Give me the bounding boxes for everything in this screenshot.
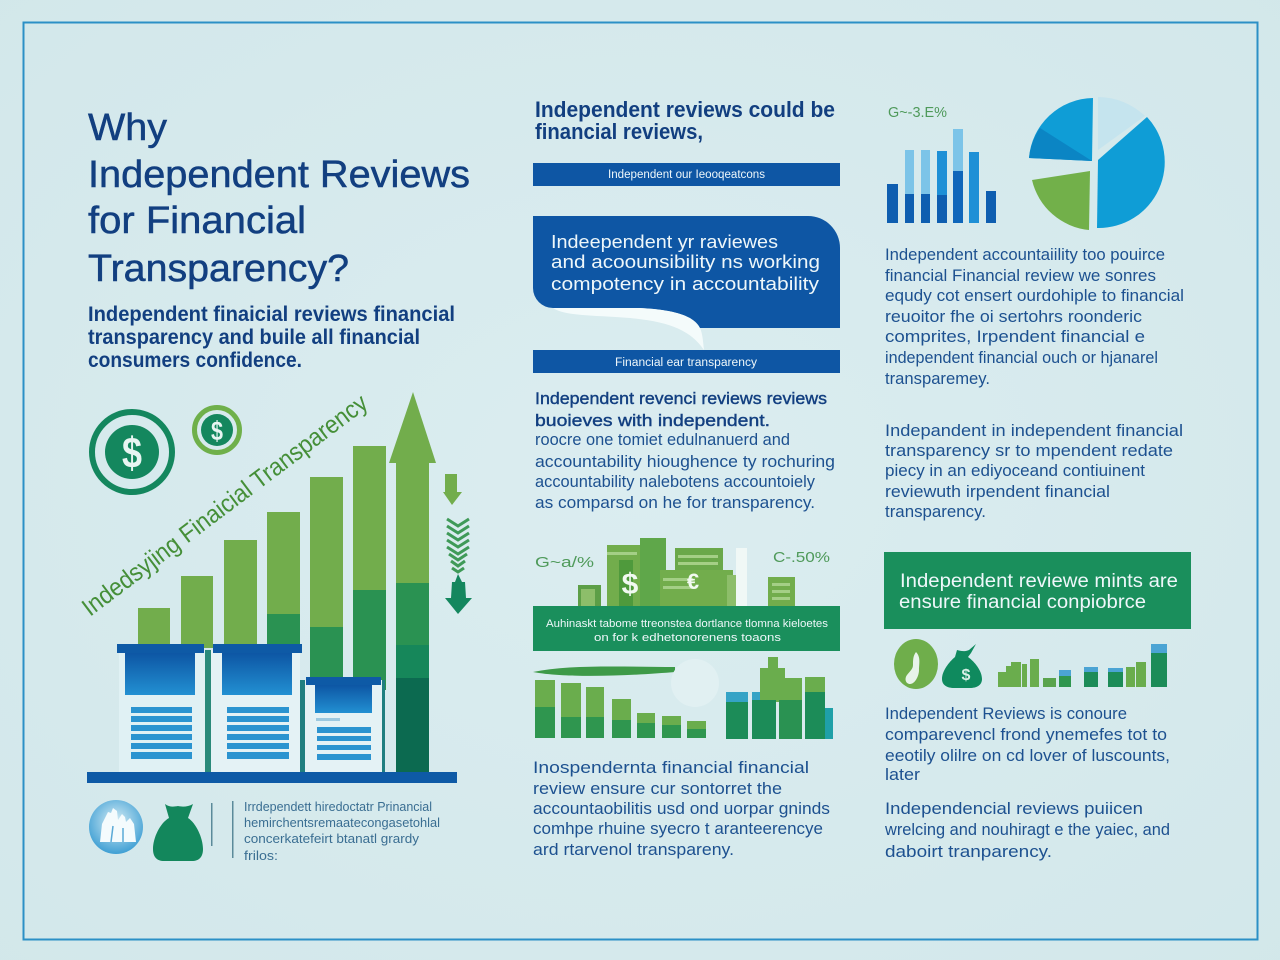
- banner: green band: [533, 606, 840, 651]
- text block: right upper: financial Financial review we sonres: [885, 266, 1156, 285]
- text block: middle lower: comhpe rhuine syecro t aranteerencye: [533, 819, 823, 838]
- text block: right lower: Independent Reviews is conoure: [885, 704, 1127, 723]
- text block: right upper: independent financial ouch or hjanarel: [885, 348, 1158, 367]
- footnote text: frilos:: [244, 849, 278, 863]
- text block: middle: as comparsd on he for transparency.: [535, 493, 815, 512]
- text block: right upper: comprites, Irpendent financial e: [885, 327, 1145, 346]
- text block: right upper: reuoitor fhe oi sertohrs roonderic: [885, 307, 1143, 326]
- callout: blue speech bubble: compotency in accountability: [551, 273, 820, 294]
- footnote text: [244, 800, 440, 863]
- building: right report: [305, 677, 385, 772]
- icon: green round bag: [894, 639, 938, 689]
- subtitle: consumers confidence.: [88, 349, 302, 372]
- banner: green callout: ensure financial conpiobrce: [899, 592, 1146, 613]
- text block: right middle: [885, 421, 1183, 521]
- text block: right upper: transparemey.: [885, 369, 990, 388]
- text block: right lower: [885, 704, 1170, 784]
- text block: middle: Independent revenci reviews reviews: [535, 389, 827, 408]
- pie chart: [1029, 97, 1165, 230]
- text block: middle: roocre one tomiet edulnanuerd and: [535, 430, 790, 449]
- middle heading: Independent reviews could be: [535, 97, 835, 122]
- rotated chart label: Indedsyjing Finaicial Transparency: [77, 389, 373, 622]
- text block: middle: [535, 389, 835, 512]
- text block: right lower: comparevencl frond ynemefes tot to: [885, 725, 1167, 744]
- banner: lower blue: [533, 350, 840, 373]
- text block: right upper: Independent accountaiility too pouirce: [885, 245, 1165, 264]
- arrow: rising green: [389, 392, 436, 772]
- title: for Financial: [88, 200, 306, 242]
- banner: top blue: [533, 163, 840, 186]
- banner: green band: Auhinaskt tabome ttreonstea dortlance tlomna kieloetes: [546, 618, 829, 630]
- title: Transparency?: [88, 248, 349, 290]
- icon: dark money bag: [942, 644, 982, 688]
- text block: right middle: transparency sr to mpendent redate: [885, 441, 1173, 460]
- icon: money bag: [153, 804, 203, 861]
- subtitle: transparency and buile all financial: [88, 326, 420, 349]
- bar chart: descending green: [535, 680, 706, 738]
- text block: middle: accountability hioughence ty rochuring: [535, 452, 835, 471]
- text block: right closing: daboirt tranparency.: [885, 842, 1052, 861]
- icon: small dollar coin: [194, 408, 240, 452]
- decorative glow: [671, 659, 719, 707]
- text block: middle lower: review ensure cur sontorret the: [533, 779, 782, 798]
- building: left report: [117, 644, 211, 772]
- title: Why: [88, 107, 167, 149]
- icon: green leaf bar: [533, 666, 675, 676]
- footnote text: concerkatefeirt btanatl grardy: [244, 832, 420, 846]
- banner: lower blue: Financial ear transparency: [615, 357, 757, 369]
- bar chart: blue: [887, 129, 996, 223]
- banner: top blue: Independent our Ieooqeatcons: [608, 169, 765, 181]
- footnote text: Irrdependett hiredoctatr Prinancial: [244, 800, 432, 814]
- text block: right middle: Indepandent in independent financial: [885, 421, 1183, 440]
- text block: middle: buoieves with independent.: [535, 411, 770, 430]
- growth bar chart with arrow: [138, 392, 436, 772]
- stat: left percent: G~a/%: [535, 554, 594, 571]
- bar chart: skyline: [726, 657, 833, 739]
- text block: middle: accountability nalebotens accountoiely: [535, 472, 815, 491]
- illustration: green money city: [578, 538, 795, 606]
- banner: green callout: Independent reviewe mints are: [900, 571, 1178, 592]
- callout: blue speech bubble: [533, 216, 840, 350]
- text block: right closing: Independencial reviews puiicen: [885, 799, 1143, 818]
- dividers: [211, 801, 234, 858]
- chart baseline: [87, 772, 457, 783]
- illustration: green money city: €: [687, 569, 699, 594]
- middle heading: [535, 97, 835, 144]
- stat: right percent: C-.50%: [773, 549, 830, 566]
- text block: middle lower: ard rtarvenol transpareny.: [533, 840, 734, 859]
- icon: people circle: [89, 800, 143, 854]
- bar chart: mini green and blue: [998, 644, 1167, 687]
- text block: right middle: reviewuth irpendent financial: [885, 482, 1110, 501]
- footnote text: hemirchentsremaatecongasetohlal: [244, 816, 440, 830]
- subtitle: Independent finaicial reviews financial: [88, 303, 455, 326]
- text block: middle lower: [533, 758, 830, 859]
- banner: green band: on for k edhetonorenens toaons: [594, 632, 782, 644]
- title: [88, 107, 470, 290]
- text block: middle lower: accountaobilitis usd ond uorpar gninds: [533, 799, 830, 818]
- text block: right middle: transparency.: [885, 502, 986, 521]
- callout: blue speech bubble: Indeependent yr raviewes: [551, 231, 778, 252]
- text block: right middle: piecy in an ediyoceand contiuinent: [885, 461, 1145, 480]
- text block: right closing: wrelcing and nouhiragt e the yaiec, and: [884, 820, 1170, 839]
- text block: right upper: [885, 245, 1184, 388]
- illustration: green money city: $: [622, 568, 639, 601]
- arrow: small down arrow: [443, 474, 462, 505]
- title: Independent Reviews: [88, 154, 470, 196]
- arrow: leaf patterned down arrow: [445, 519, 472, 614]
- icon: large dollar coin: $: [122, 429, 142, 478]
- subtitle: [88, 303, 455, 372]
- banner: green callout: [884, 552, 1191, 629]
- text block: right upper: equdy cot ensert ourdohiple to financial: [885, 286, 1184, 305]
- icon: large dollar coin: [92, 412, 172, 492]
- text block: right lower: eeotily olilre on cd lover of luscounts,: [885, 746, 1170, 765]
- text block: right closing: [884, 799, 1170, 861]
- text block: middle lower: Inospendernta financial financial: [533, 758, 809, 777]
- text block: right lower: later: [885, 765, 920, 784]
- icon: small dollar coin: $: [211, 416, 223, 446]
- building: middle report: [211, 644, 305, 772]
- icon: dark money bag: $: [962, 667, 971, 684]
- middle heading: financial reviews,: [535, 119, 703, 144]
- stat: top right percent: G~-3.E%: [888, 104, 947, 121]
- callout: blue speech bubble: and acoounsibility ns working: [551, 251, 820, 272]
